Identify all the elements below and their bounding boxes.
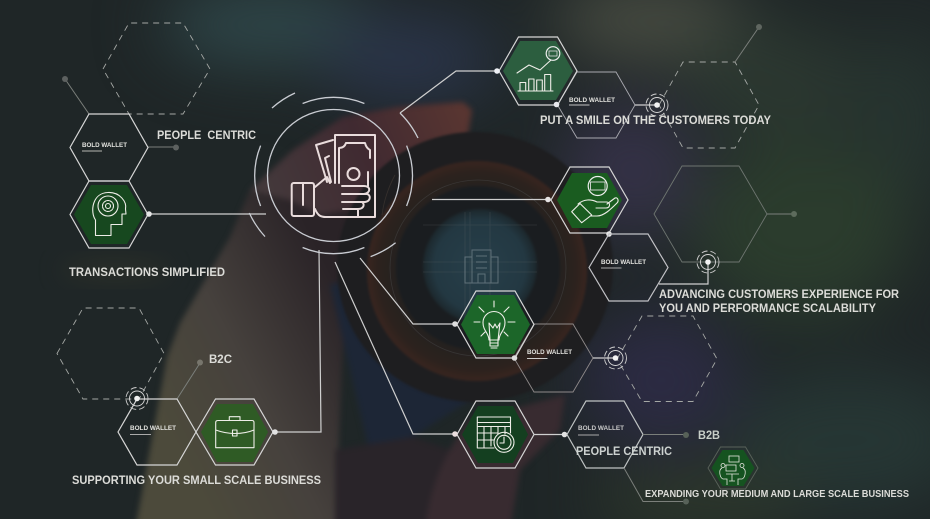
caption: supporting: SUPPORTING YOUR SMALL SCALE BUSINESS — [72, 473, 321, 487]
node dot — [146, 211, 152, 217]
hand palm and wrist — [134, 190, 347, 519]
panel: lightbulb node — [452, 291, 717, 402]
bold wallet hexagon: BOLD WALLET — [601, 260, 646, 266]
icon: calendar with clock on green hexagon — [457, 401, 534, 468]
bold wallet hexagon — [567, 401, 643, 468]
bold wallet hexagon — [514, 324, 593, 392]
gray connector — [767, 211, 797, 217]
bold wallet hexagon: BOLD WALLET — [578, 426, 624, 432]
dashed hexagon — [617, 316, 717, 402]
node dot — [272, 429, 278, 435]
bold wallet hexagon — [70, 114, 148, 181]
label: people centric: PEOPLE CENTRIC — [576, 444, 672, 458]
icon: hand holding banknotes — [292, 135, 375, 217]
heading: people centric: PEOPLE CENTRIC — [157, 128, 256, 142]
gray connector — [177, 360, 203, 399]
caption: advancing customers: ADVANCING CUSTOMERS EXPERIENCE FOR — [659, 287, 899, 301]
bold wallet hexagon — [589, 234, 668, 301]
bold wallet hexagon: BOLD WALLET — [569, 98, 615, 104]
label: B2C: B2C — [209, 354, 232, 366]
gray connector — [735, 24, 762, 62]
target node — [593, 347, 626, 369]
panel: B2B, people centric — [452, 401, 909, 504]
dashed hexagon top left — [103, 23, 210, 114]
caption: transactions simplified: TRANSACTIONS SIMPLIFIED — [69, 267, 225, 279]
icon: hand offering coin on green hexagon — [551, 167, 628, 233]
thin large hexagon — [654, 166, 767, 262]
icon: faint building in lens — [465, 250, 498, 283]
dashed hexagon — [57, 308, 164, 399]
lens tread, brass ring, inner barrel and glass — [337, 132, 613, 402]
bold wallet hexagon: BOLD WALLET — [130, 426, 176, 432]
panel: put a smile on the customers today — [494, 24, 771, 148]
icon: lightbulb on green hexagon — [457, 291, 534, 358]
panel: B2C, small business — [57, 308, 321, 487]
panel: people centric, transactions simplified — [62, 23, 256, 279]
icon: head with gear on green hexagon — [70, 181, 148, 248]
icon: growth chart on green hexagon — [499, 37, 577, 105]
bold wallet hexagon — [118, 399, 196, 465]
caption: advancing customers: YOU AND PERFORMANCE SCALABILITY — [659, 301, 876, 315]
bold wallet hexagon: BOLD WALLET — [527, 350, 572, 356]
panel: advancing customers experience — [545, 166, 899, 315]
dashed hexagon — [659, 62, 759, 148]
label: B2B: B2B — [698, 430, 720, 442]
node dots — [494, 68, 559, 107]
target node with elbow — [659, 251, 719, 284]
bold wallet hexagon: BOLD WALLET — [82, 143, 127, 149]
bold wallet hexagon — [558, 72, 635, 138]
node dots — [452, 431, 567, 437]
connectors: lines from central circle to the hexagon nodes — [149, 71, 548, 434]
node dots — [452, 321, 517, 361]
gray connector and dots — [62, 76, 179, 150]
gray connectors — [624, 432, 689, 504]
icon: meeting people on green hexagon — [708, 447, 758, 489]
target node — [635, 94, 668, 116]
caption: expanding: EXPANDING YOUR MEDIUM AND LARGE SCALE BUSINESS — [645, 489, 909, 500]
central money-in-hand emblem — [249, 93, 418, 257]
node dots — [545, 197, 612, 237]
icon: briefcase on green hexagon — [196, 399, 273, 465]
caption: put a smile: PUT A SMILE ON THE CUSTOMERS TODAY — [540, 113, 771, 127]
target node — [126, 388, 148, 410]
caption: advancing customers — [659, 287, 899, 315]
